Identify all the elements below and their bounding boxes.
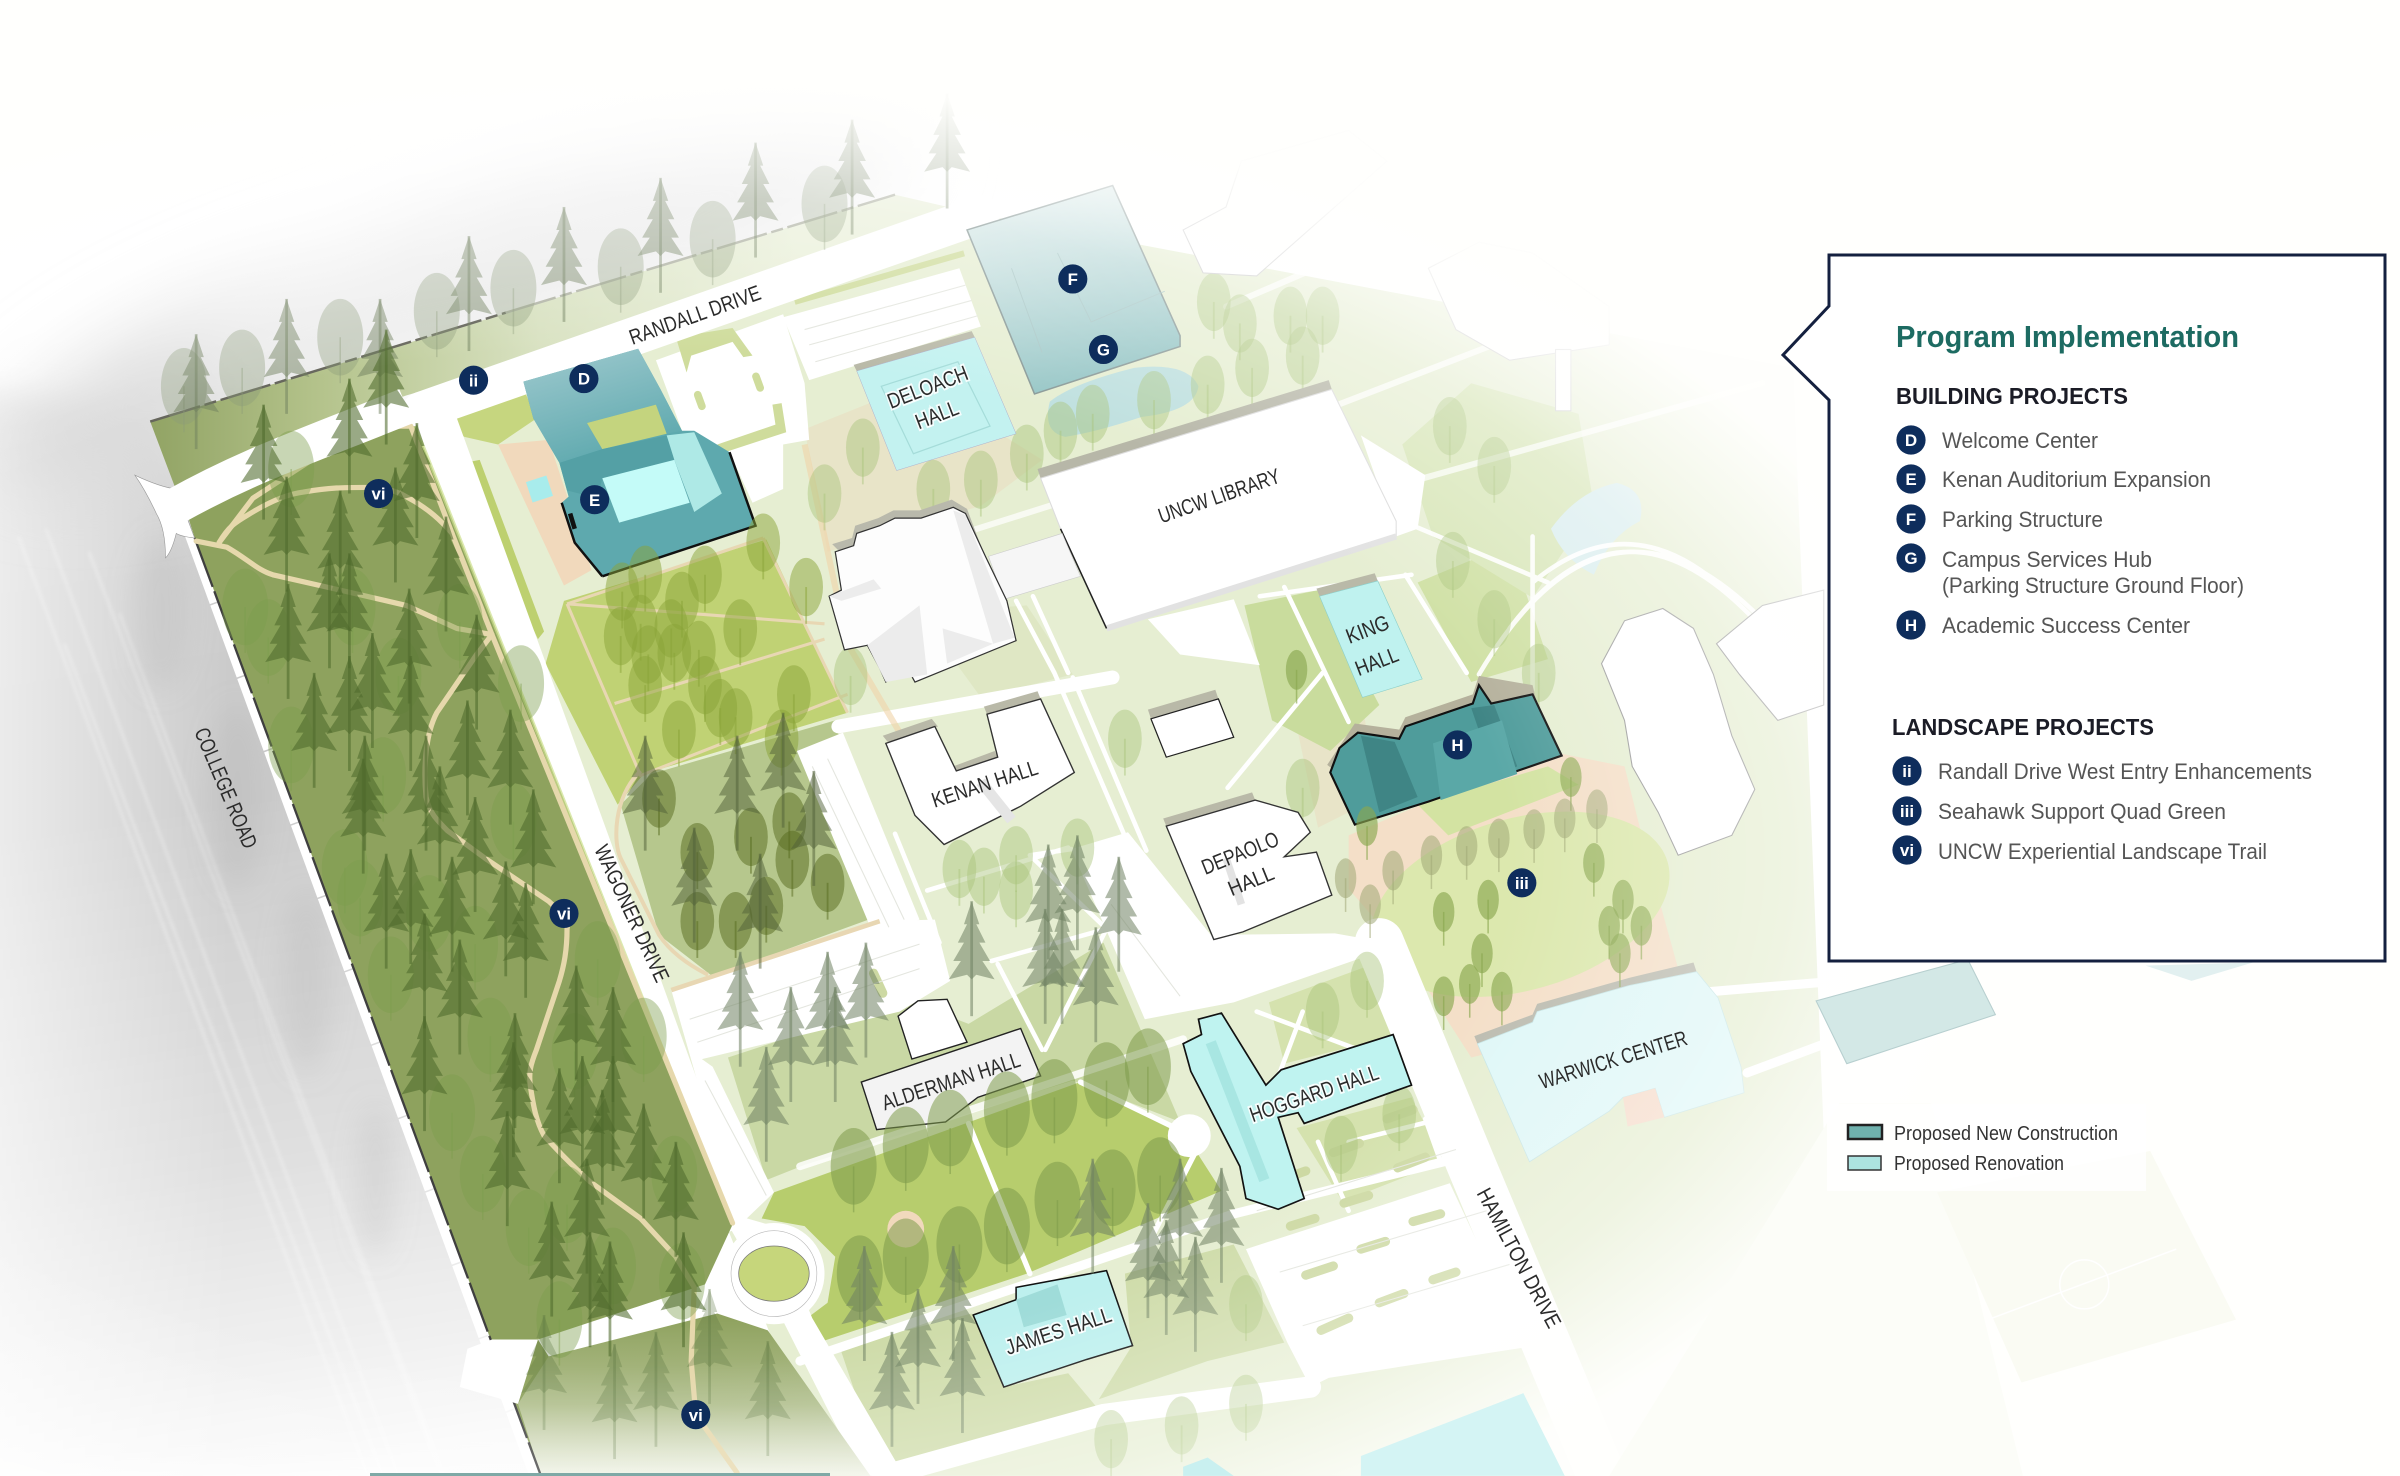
building: DePaolo Hall <box>1163 792 1332 940</box>
building: UNCW Library <box>1038 380 1396 628</box>
legend: Proposed New Construction <box>1894 1123 2118 1145</box>
road and building labels: HALL <box>1224 861 1278 901</box>
soft campus trees <box>808 273 1556 1476</box>
building: James Hall <box>973 1271 1133 1387</box>
building: Kenan Hall <box>883 691 1074 845</box>
road and building labels: UNCW LIBRARY <box>1155 464 1283 528</box>
building: Warwick Center <box>1474 963 1744 1162</box>
list: building projects: Campus Services Hub <box>1942 547 2152 572</box>
list: landscape projects <box>1892 714 2312 865</box>
list: building projects: Kenan Auditorium Expansion <box>1942 467 2211 492</box>
aerial photo context <box>0 307 567 1476</box>
white path connections at forest edges <box>135 475 538 1404</box>
list: landscape projects: ii <box>1902 762 1912 781</box>
building: King Hall <box>1316 573 1422 697</box>
list: building projects: (Parking Structure Ground Floor) <box>1942 573 2244 598</box>
list: landscape projects: iii <box>1900 802 1914 821</box>
roads and lots <box>656 268 1526 1476</box>
list: building projects: Welcome Center <box>1942 428 2098 453</box>
building: Alderman Hall <box>861 999 1041 1130</box>
panel: program implementation <box>1783 255 2385 961</box>
building: south blue hall <box>1183 1393 1565 1476</box>
lot islands north <box>676 250 965 454</box>
map markers: vi <box>372 485 386 504</box>
map markers: E <box>589 491 600 510</box>
parking stalls <box>690 285 1510 1326</box>
list: building projects: H <box>1905 616 1917 635</box>
bottom rule <box>370 1473 830 1476</box>
north road white overlay <box>176 406 406 506</box>
road and building labels: WAGONER DRIVE <box>589 841 674 986</box>
map markers: D <box>578 370 590 389</box>
north verge along Randall Drive <box>150 195 981 490</box>
road and building labels: COLLEGE ROAD <box>189 724 262 852</box>
list: building projects: E <box>1905 470 1917 489</box>
road and building labels: HALL <box>912 396 962 434</box>
road and building labels: DELOACH <box>884 361 971 414</box>
road and building labels <box>189 281 1690 1360</box>
forest trees <box>222 330 791 1459</box>
campus quad trees <box>604 513 1652 1447</box>
heading: program implementation: Program Implementation <box>1896 319 2239 354</box>
list: building projects: Parking Structure <box>1942 507 2103 532</box>
road and building labels: ALDERMAN HALL <box>879 1048 1023 1115</box>
list: landscape projects: vi <box>1900 841 1914 860</box>
building: small annex <box>1148 690 1234 757</box>
road and building labels: HAMILTON DRIVE <box>1472 1184 1566 1332</box>
list: building projects: D <box>1905 431 1917 450</box>
building: Hoggard Hall <box>1183 1013 1411 1209</box>
list: building projects: G <box>1904 549 1918 568</box>
list: building projects: F <box>1906 510 1916 529</box>
fog above campus north edge <box>0 54 942 530</box>
building: parking structure F G <box>967 186 1180 394</box>
map markers: vi <box>689 1406 703 1425</box>
road and building labels: DEPAOLO <box>1198 827 1282 880</box>
building: faded blue hall east <box>1816 959 2253 1064</box>
legend <box>1827 1104 2146 1191</box>
building: Academic Success Center <box>1327 676 1562 825</box>
legend: Proposed Renovation <box>1894 1153 2064 1175</box>
map markers: G <box>1097 341 1110 360</box>
road and building labels: HOGGARD HALL <box>1247 1061 1382 1127</box>
road and building labels: JAMES HALL <box>1002 1303 1115 1360</box>
campus ground <box>421 215 1992 1476</box>
list: landscape projects: Randall Drive West Entry Enhancements <box>1938 759 2312 784</box>
road and building labels: KENAN HALL <box>929 756 1041 813</box>
forest west of Wagoner Drive <box>189 426 870 1476</box>
list: landscape projects: LANDSCAPE PROJECTS <box>1892 714 2154 740</box>
tan walks <box>567 445 920 990</box>
building: west hall and connector <box>829 500 1080 682</box>
parking islands <box>874 973 1456 1330</box>
road and building labels: HALL <box>1352 643 1402 681</box>
road and building labels: KING <box>1343 610 1393 649</box>
experiential landscape trail <box>196 426 737 1473</box>
list: landscape projects: Seahawk Support Quad Green <box>1938 799 2226 824</box>
map markers: vi <box>557 905 571 924</box>
building: Welcome Center and Kenan Auditorium <box>523 349 756 576</box>
list: building projects: Academic Success Center <box>1942 613 2190 638</box>
map markers: iii <box>1515 874 1529 893</box>
map markers <box>364 264 1536 1429</box>
list: building projects: BUILDING PROJECTS <box>1896 383 2128 409</box>
ponds <box>1048 367 1198 437</box>
east campus buildings <box>1183 130 1824 855</box>
seahawk plaza <box>1349 751 1686 1058</box>
map markers: ii <box>469 371 478 390</box>
road and building labels: WARWICK CENTER <box>1536 1026 1690 1094</box>
building: DeLoach Hall <box>854 331 1016 471</box>
road and building labels: RANDALL DRIVE <box>626 281 764 350</box>
list: building projects <box>1896 383 2244 640</box>
faint fields south east <box>1609 1104 2236 1476</box>
map markers: H <box>1451 736 1464 755</box>
map markers: F <box>1068 270 1078 289</box>
list: landscape projects: UNCW Experiential Landscape Trail <box>1938 839 2267 864</box>
north verge trees <box>161 94 970 449</box>
